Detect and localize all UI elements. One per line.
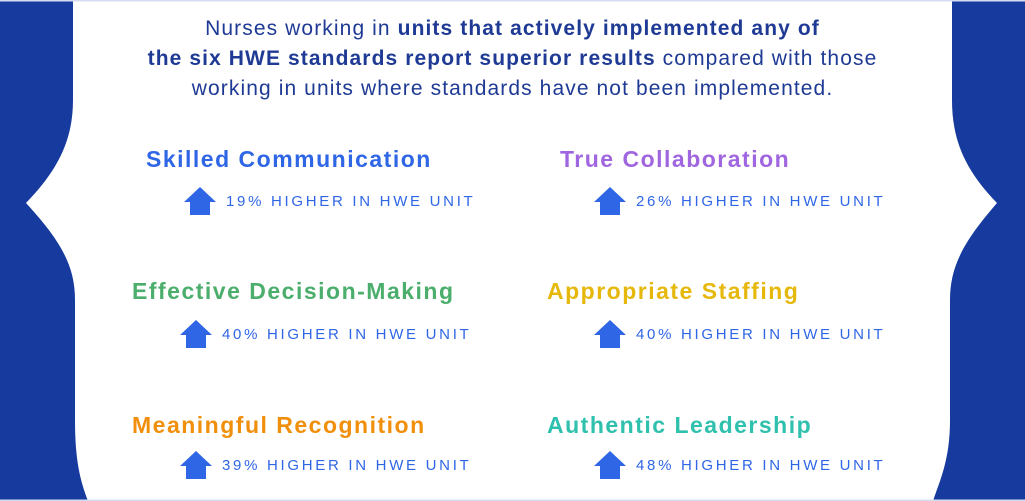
item: Authentic Leadership	[547, 412, 885, 479]
item: Meaningful Recognition: 39% HIGHER IN HWE UNIT	[222, 456, 471, 474]
item: Meaningful Recognition: Meaningful Recognition	[132, 412, 426, 438]
item: True Collaboration	[560, 146, 885, 215]
item: Skilled Communication: Skilled Communication	[146, 146, 432, 172]
item: Authentic Leadership: Authentic Leadership	[547, 412, 812, 438]
item: Appropriate Staffing: 40% HIGHER IN HWE UNIT	[636, 326, 885, 342]
item: Appropriate Staffing	[547, 278, 885, 348]
item: Skilled Communication: 19% HIGHER IN HWE UNIT	[226, 192, 475, 210]
item: Effective Decision-Making: 40% HIGHER IN HWE UNIT	[222, 326, 471, 342]
item: Effective Decision-Making: Effective Decision-Making	[132, 278, 455, 304]
item: Appropriate Staffing: Appropriate Staffing	[547, 278, 799, 304]
item: Meaningful Recognition	[132, 412, 471, 479]
item: Effective Decision-Making	[132, 278, 471, 348]
item: Authentic Leadership: 48% HIGHER IN HWE UNIT	[636, 456, 885, 474]
intro text: working in units where standards have not been implemented.	[192, 77, 833, 100]
intro text	[148, 17, 877, 100]
item: Skilled Communication	[146, 146, 475, 215]
item: True Collaboration: True Collaboration	[560, 146, 790, 172]
intro text: the six HWE standards report superior results compared with those	[148, 47, 877, 70]
intro text: Nurses working in units that actively implemented any of	[205, 17, 820, 40]
item: True Collaboration: 26% HIGHER IN HWE UNIT	[636, 192, 885, 210]
